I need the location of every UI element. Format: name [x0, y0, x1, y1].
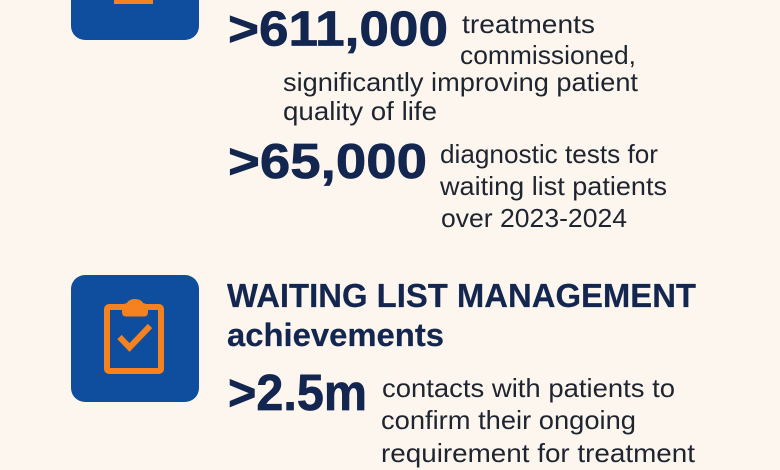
stat: diagnostic tests	[228, 135, 667, 233]
stat: patient contacts	[228, 364, 696, 468]
description: patient contacts: confirm their ongoing	[381, 405, 636, 435]
description: treatments commissioned: commissioned,	[460, 40, 636, 70]
description: treatments commissioned: quality of life	[283, 96, 437, 126]
heading: waiting list management achievements	[227, 277, 696, 353]
number: 65,000: >65,000	[228, 135, 427, 189]
description: treatments commissioned: significantly improving patient	[283, 67, 639, 97]
description: patient contacts: contacts with patients to	[382, 373, 675, 403]
heading: waiting list management achievements: WAITING LIST MANAGEMENT	[227, 277, 696, 314]
description: diagnostic tests	[439, 139, 667, 233]
number: 2.5m: >2.5m	[228, 364, 367, 421]
heading: waiting list management achievements: achievements	[227, 317, 444, 353]
icon: clipboard with check mark	[71, 275, 199, 402]
description: treatments commissioned	[283, 9, 639, 126]
number: 611,000: >611,000	[228, 2, 448, 56]
description: diagnostic tests: waiting list patients	[439, 171, 667, 201]
description: patient contacts	[381, 373, 696, 468]
description: diagnostic tests: over 2023-2024	[441, 203, 627, 233]
description: patient contacts: requirement for treatment	[381, 438, 696, 468]
description: diagnostic tests: diagnostic tests for	[440, 139, 658, 169]
icon: cropped blue tile with orange mark	[71, 0, 199, 40]
description: treatments commissioned: treatments	[462, 9, 595, 39]
stat: treatments commissioned	[228, 2, 639, 126]
